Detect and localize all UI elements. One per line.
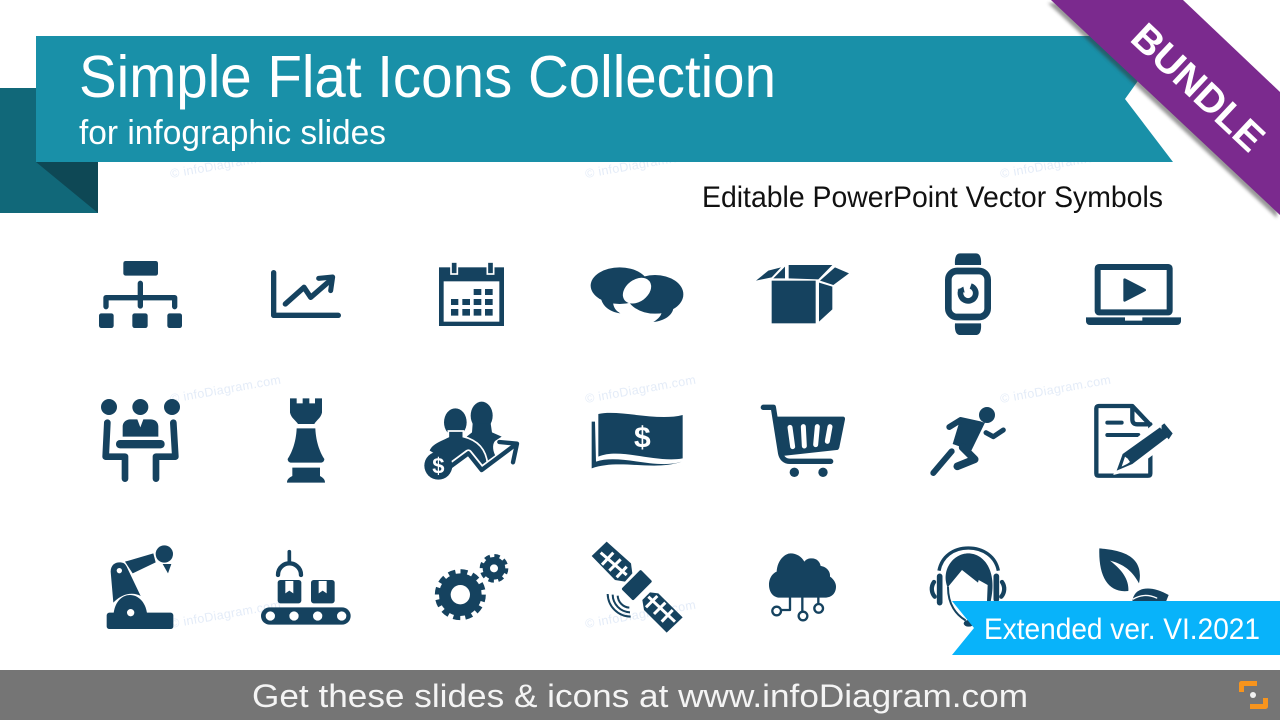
icon: document and pencil <box>1096 406 1177 476</box>
watermarks: © infoDiagram.com <box>169 598 282 631</box>
icon: conveyor belt <box>261 552 351 625</box>
bundle ribbon: BUNDLE <box>1122 15 1273 160</box>
watermarks: © infoDiagram.com <box>584 148 697 181</box>
icon: runner <box>933 407 1003 473</box>
icon: growth line chart <box>274 273 338 315</box>
icon: cloud network <box>769 553 836 620</box>
version label: Extended ver. VI.2021 <box>984 613 1260 646</box>
icon: dollar banknote <box>592 413 683 468</box>
folded ribbon back <box>0 88 98 213</box>
tagline: Editable PowerPoint Vector Symbols <box>702 181 1163 214</box>
title: Simple Flat Icons Collection <box>79 44 776 110</box>
icon: people, money and growth arrow <box>424 402 517 480</box>
watermarks: © infoDiagram.com <box>169 148 282 181</box>
icon: dollar banknote: $ <box>634 421 651 454</box>
icon: laptop video <box>1086 267 1181 325</box>
bundle ribbon <box>1048 0 1280 218</box>
icon: gears <box>437 556 506 618</box>
icon: support headset <box>932 548 1004 627</box>
icon: org chart <box>99 261 182 328</box>
version ribbon <box>952 601 1280 655</box>
icon: speech bubbles <box>591 267 683 322</box>
icon: chess rook <box>287 398 325 483</box>
footer bar <box>0 670 1280 720</box>
watermarks <box>169 148 1112 631</box>
icon: meeting <box>101 399 180 479</box>
icon: satellite <box>592 542 683 633</box>
watermarks: © infoDiagram.com <box>999 373 1112 406</box>
watermarks: © infoDiagram.com <box>999 148 1112 181</box>
footer text: Get these slides & icons at www.infoDiagram.com <box>252 678 1028 714</box>
icon: open box <box>756 265 849 323</box>
icon: people, money and growth arrow: $ <box>432 454 444 479</box>
icon: shopping cart <box>763 407 845 477</box>
icon: calendar <box>439 262 504 326</box>
subtitle: for infographic slides <box>79 114 386 152</box>
watermarks: © infoDiagram.com <box>584 598 697 631</box>
icon: leaves <box>1099 548 1169 602</box>
watermarks: © infoDiagram.com <box>169 373 282 406</box>
header banner <box>36 36 1173 162</box>
icon: robot arm <box>107 545 173 629</box>
watermarks: © infoDiagram.com <box>584 373 697 406</box>
icon: infoDiagram logo <box>1242 684 1266 706</box>
icon: smart watch <box>948 253 988 335</box>
